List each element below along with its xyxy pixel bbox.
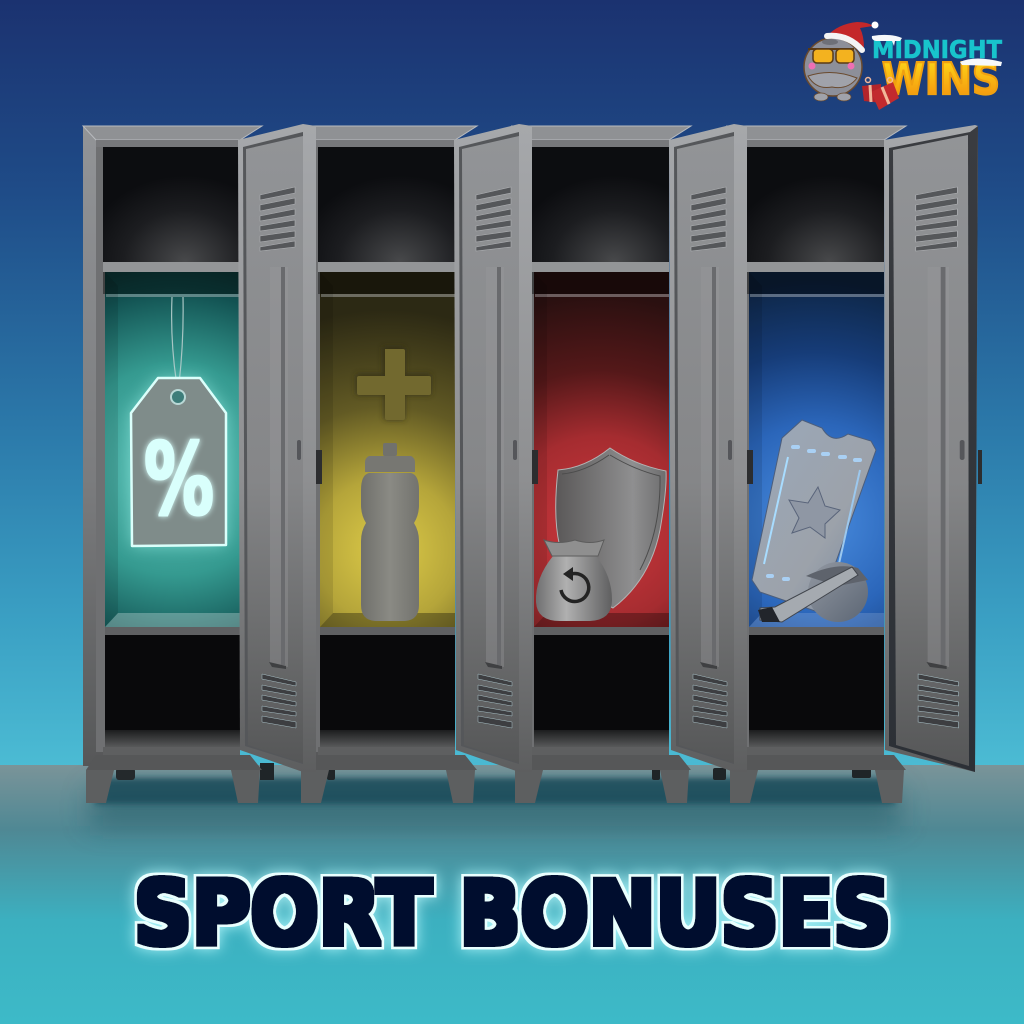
icon: gift boxes	[862, 78, 899, 110]
logo: Midnight Wins	[804, 22, 1002, 110]
icon: hanging string	[172, 297, 183, 392]
locker 4: blue with ticket and whistle	[713, 125, 982, 803]
icon: shield	[556, 448, 666, 608]
icon: ticket with star	[752, 420, 876, 612]
icon: water bottle	[361, 443, 419, 621]
logo word: WINS: WINS	[882, 54, 1000, 105]
locker 3: red with shield and money bag	[512, 124, 753, 803]
snow caps	[872, 35, 1002, 66]
locker 1: teal with percent tag	[83, 124, 322, 803]
background	[0, 0, 1024, 770]
icon: money bag with return arrow	[536, 540, 612, 621]
icon: whistle	[758, 562, 868, 622]
floor	[0, 765, 1024, 1024]
door 4	[884, 125, 982, 772]
mascot: moon character with santa hat	[804, 22, 878, 101]
locker 2: yellow with cross and bottle	[298, 124, 538, 803]
icon: percent price tag	[131, 378, 226, 546]
title: SPORT BONUSES	[134, 862, 891, 965]
icon: percent price tag: %	[144, 421, 214, 538]
logo word: MIDNIGHT: MIDNIGHT	[872, 35, 1002, 64]
icon: medical cross	[356, 347, 431, 420]
